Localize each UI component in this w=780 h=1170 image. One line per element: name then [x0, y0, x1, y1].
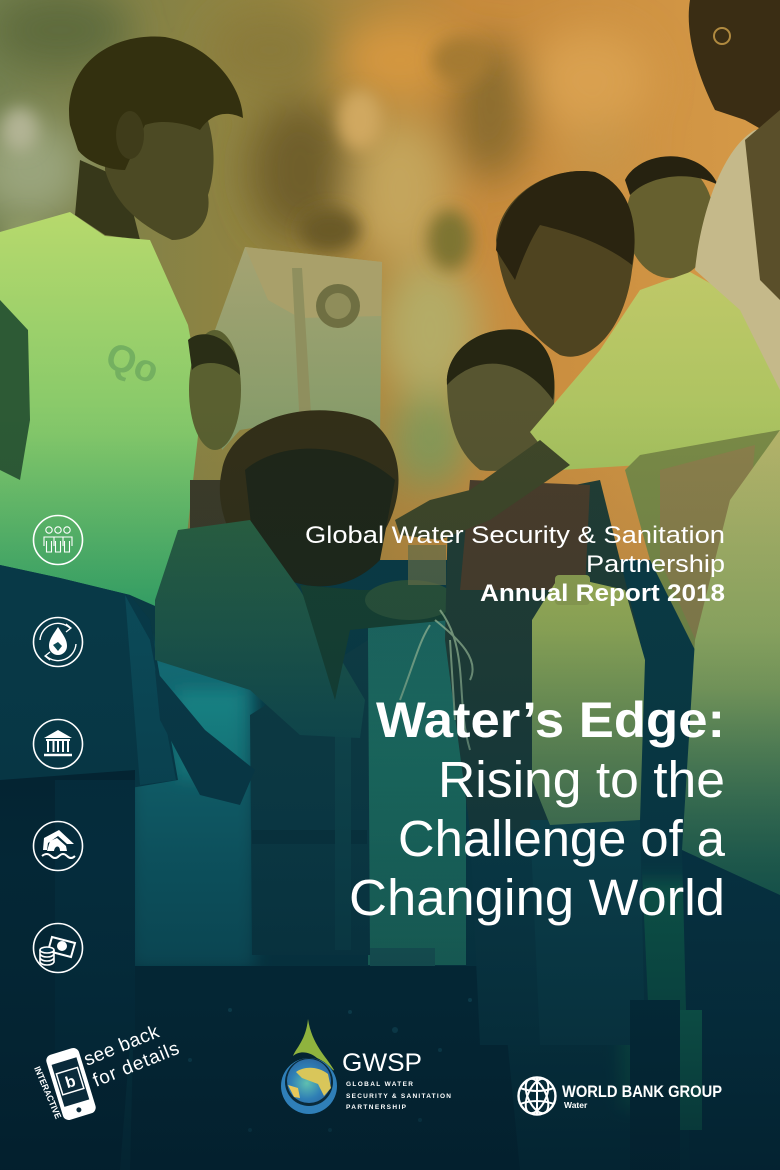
interactive phone callout — [32, 1021, 182, 1121]
child drinking at the pump — [155, 410, 455, 738]
interactive phone callout: INTERACTIVE — [32, 1065, 63, 1120]
girl in the centre — [445, 329, 650, 1045]
GWSP logo — [281, 1019, 451, 1114]
tall person at the right edge — [630, 0, 780, 1170]
icon: smartphone — [45, 1047, 97, 1121]
report subtitle: Global Water Security & Sanitation — [305, 522, 725, 549]
hair — [69, 37, 243, 170]
icon: GWSP water drop globe — [281, 1019, 337, 1114]
icon: water drop with globe and arrows — [34, 618, 82, 666]
icon: flooded house — [34, 822, 82, 870]
GWSP logo: GLOBAL WATER — [346, 1081, 413, 1088]
legs — [0, 770, 135, 1170]
icon: World Bank globe — [518, 1075, 556, 1117]
World Bank Group logo: WORLD BANK GROUP — [562, 1083, 722, 1101]
shorts — [0, 565, 178, 800]
World Bank Group logo — [518, 1075, 722, 1117]
main title: Challenge of a — [398, 810, 726, 867]
face — [105, 90, 214, 240]
main title: Rising to the — [438, 751, 725, 808]
green panel behind the pump — [368, 620, 466, 965]
report subtitle — [305, 522, 725, 607]
interactive phone callout: for details — [90, 1038, 182, 1092]
bottom darkening overlay — [0, 400, 780, 1170]
neck — [75, 160, 140, 240]
left child in green shirt — [0, 37, 255, 1170]
GWSP logo: SECURITY & SANITATION — [346, 1093, 451, 1100]
icon: bank building — [34, 720, 82, 768]
report subtitle: Partnership — [586, 551, 725, 578]
pump base — [130, 966, 520, 1170]
GWSP logo: PARTNERSHIP — [346, 1104, 407, 1111]
icon: people — [34, 516, 82, 564]
water droplets on the base — [188, 998, 472, 1132]
water pump — [130, 247, 520, 1170]
report subtitle: Annual Report 2018 — [480, 580, 725, 607]
main title: Changing World — [349, 869, 725, 926]
splashing water — [400, 545, 473, 750]
teal background behind the children — [130, 650, 255, 970]
sidebar icons — [34, 516, 82, 972]
icon: coins and banknote — [34, 924, 82, 972]
main title: Water’s Edge: — [376, 692, 725, 748]
main title — [349, 692, 726, 926]
small child behind the pump — [188, 330, 241, 530]
boy in yellow-green shirt — [395, 156, 780, 660]
yellow jerry can — [532, 575, 645, 825]
left child in green shirt: Qo — [100, 335, 164, 393]
interactive phone callout: see back — [81, 1021, 163, 1071]
GWSP logo: GWSP — [342, 1049, 422, 1077]
World Bank Group logo: Water — [564, 1100, 588, 1110]
icon: smartphone: b — [63, 1073, 78, 1092]
